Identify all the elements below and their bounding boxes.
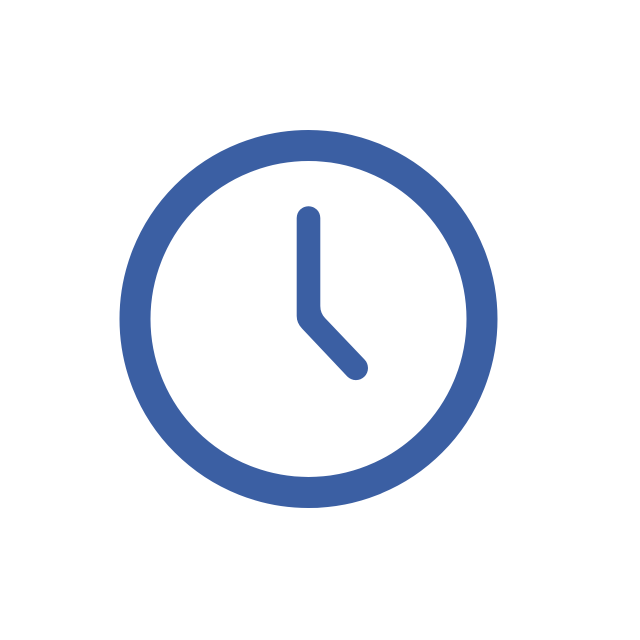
clock face ring	[135, 146, 482, 492]
clock hands	[297, 206, 368, 380]
